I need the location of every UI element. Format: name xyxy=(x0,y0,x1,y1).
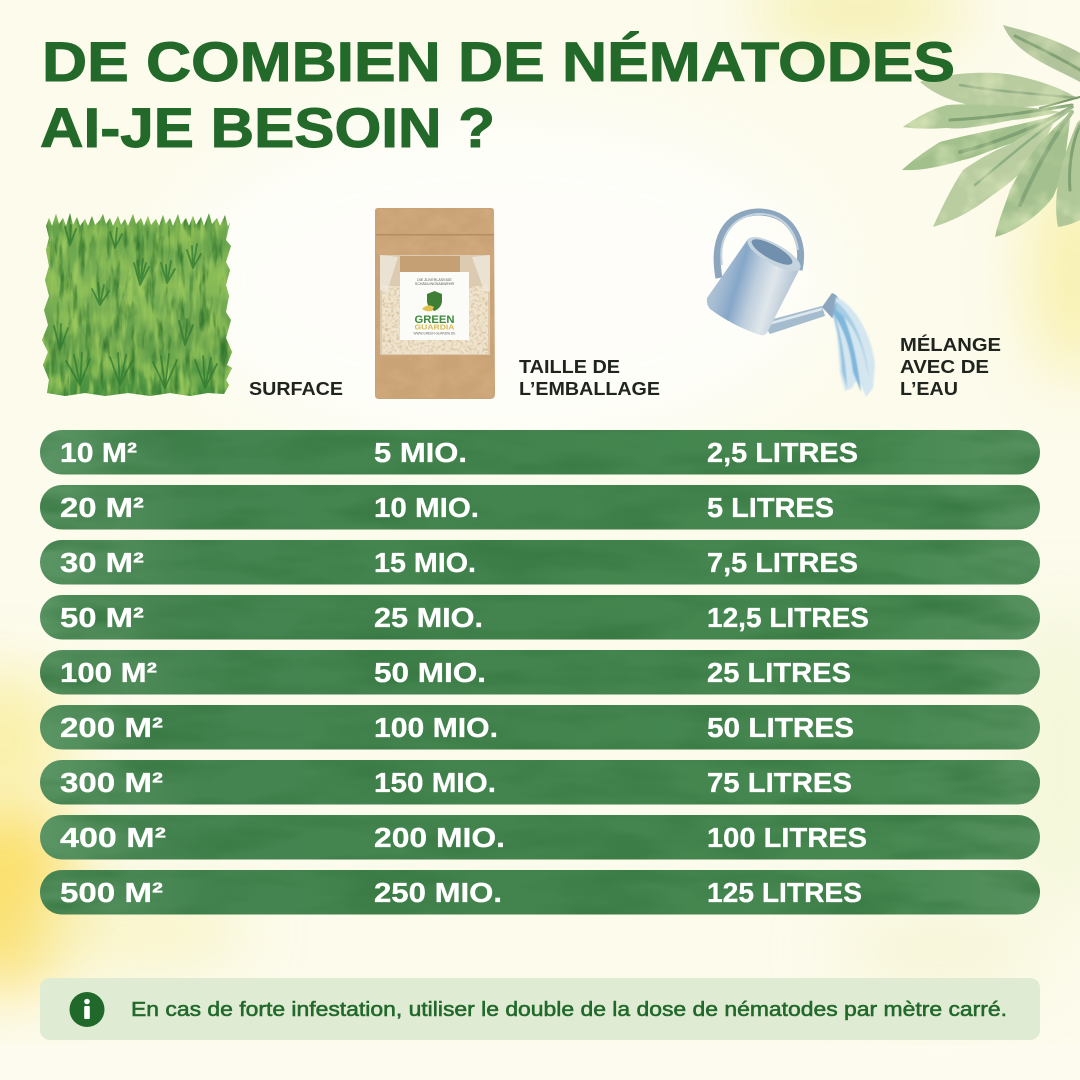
row 300 m2: 150 MIO. xyxy=(374,767,496,798)
header: surface: SURFACE xyxy=(249,378,343,399)
row 200 m2: 200 M² xyxy=(60,712,163,743)
pouch label: SCHÄDLINGSABWEHR xyxy=(415,282,454,286)
row 200 m2: 100 MIO. xyxy=(374,712,498,743)
water stream xyxy=(833,297,875,397)
row 50 m2 xyxy=(40,595,1040,640)
row 50 m2: 50 M² xyxy=(60,602,144,633)
note text: En cas de forte infestation, utiliser le double de la dose de nématodes par mètre carré. xyxy=(131,999,1007,1021)
title xyxy=(40,30,955,159)
pouch label: DIE ZUVERLÄSSIGE xyxy=(417,278,452,282)
row 50 m2: 25 MIO. xyxy=(374,602,483,633)
row 200 m2: 50 LITRES xyxy=(707,712,854,743)
table xyxy=(40,430,1040,914)
row 20 m2: 20 M² xyxy=(60,492,144,523)
row 30 m2: 15 MIO. xyxy=(374,547,476,578)
row 10 m2: 10 M² xyxy=(60,437,137,468)
header: taille de l'emballage: TAILLE DE xyxy=(519,356,620,377)
pouch label: GUARDIA xyxy=(414,324,454,332)
row 300 m2 xyxy=(40,760,1040,804)
header: taille de l'emballage: L’EMBALLAGE xyxy=(519,378,660,399)
row 10 m2: 2,5 LITRES xyxy=(707,437,858,468)
row 30 m2: 7,5 LITRES xyxy=(707,547,858,578)
row 400 m2: 400 M² xyxy=(60,822,166,853)
row 400 m2: 200 MIO. xyxy=(374,822,505,853)
pouch label: WWW.GREEN-GUARDIA.DE xyxy=(414,332,455,336)
row 500 m2: 125 LITRES xyxy=(707,877,862,908)
pouch label xyxy=(400,272,469,340)
row 30 m2 xyxy=(40,540,1040,584)
illustration: watering can xyxy=(707,212,875,397)
row 400 m2: 100 LITRES xyxy=(707,822,867,853)
row 20 m2: 10 MIO. xyxy=(374,492,479,523)
row 20 m2 xyxy=(40,485,1040,530)
row 500 m2: 500 M² xyxy=(60,877,163,908)
row 100 m2 xyxy=(40,650,1040,694)
pouch label: GREEN xyxy=(414,314,455,326)
illustration: leaves top right xyxy=(902,25,1080,237)
icon: info xyxy=(70,992,104,1027)
header: mélange avec de l'eau: MÉLANGE xyxy=(900,334,1001,355)
row 300 m2: 75 LITRES xyxy=(707,767,852,798)
row 100 m2: 25 LITRES xyxy=(707,657,851,688)
can body xyxy=(707,239,800,335)
title: DE COMBIEN DE NÉMATODES xyxy=(42,30,955,93)
can spout xyxy=(762,306,825,334)
title: AI-JE BESOIN ? xyxy=(40,96,495,159)
row 10 m2: 5 MIO. xyxy=(374,437,467,468)
row 200 m2 xyxy=(40,705,1040,750)
header: taille de l'emballage xyxy=(519,356,660,399)
illustration: grass square xyxy=(40,210,235,400)
can handle xyxy=(717,212,801,278)
row 20 m2: 5 LITRES xyxy=(707,492,834,523)
header: mélange avec de l'eau: L’EAU xyxy=(900,378,958,399)
row 400 m2 xyxy=(40,815,1040,860)
header: mélange avec de l'eau xyxy=(900,334,1001,399)
row 10 m2 xyxy=(40,430,1040,474)
row 500 m2: 250 MIO. xyxy=(374,877,502,908)
row 30 m2: 30 M² xyxy=(60,547,144,578)
row 100 m2: 100 M² xyxy=(60,657,157,688)
row 500 m2 xyxy=(40,870,1040,914)
callout: dosage note xyxy=(40,978,1040,1040)
row 300 m2: 300 M² xyxy=(60,767,163,798)
row 50 m2: 12,5 LITRES xyxy=(707,602,869,633)
illustration: kraft pouch xyxy=(375,208,495,399)
header: mélange avec de l'eau: AVEC DE xyxy=(900,356,989,377)
row 100 m2: 50 MIO. xyxy=(374,657,486,688)
